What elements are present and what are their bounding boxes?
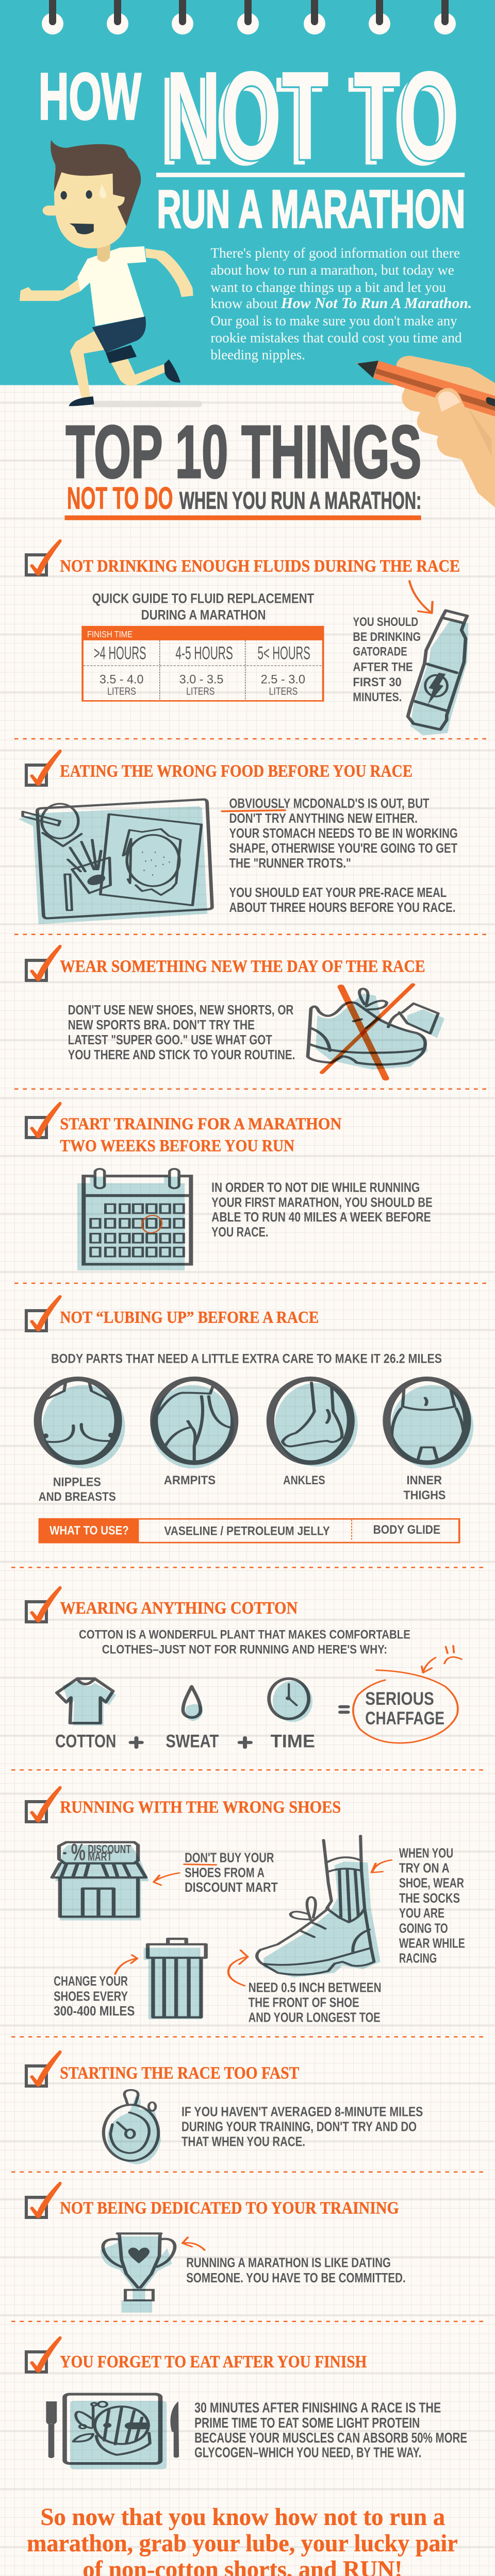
cotton equation: SWEAT — [166, 1731, 219, 1751]
change shoes note: SHOES EVERY — [54, 1989, 128, 2004]
protein text — [194, 2400, 467, 2461]
panel: 10 eat after finish — [26, 2336, 467, 2469]
icon: checkbox — [26, 1102, 62, 1138]
finish time table: >4 HOURS — [94, 643, 146, 663]
finish time table: 3.5 - 4.0 — [100, 672, 144, 686]
panel: 4 training — [26, 1102, 433, 1270]
heading: top 10 things — [65, 410, 421, 520]
body part labels: THIGHS — [403, 1488, 446, 1502]
icon: fast food tray — [19, 800, 212, 924]
fluid guide subtitle — [92, 591, 314, 622]
fluid guide subtitle: DURING A MARATHON — [141, 607, 266, 622]
finish time table: 5< HOURS — [258, 643, 310, 663]
serious chaffage callout: CHAFFAGE — [365, 1708, 444, 1728]
serious chaffage callout: SERIOUS — [365, 1689, 434, 1709]
finish time table: LITERS — [269, 686, 298, 698]
gatorade note: FIRST 30 — [353, 675, 402, 689]
shoe fit note — [228, 1950, 382, 2025]
panel: 5 lubing up — [26, 1295, 473, 1544]
icon: discount store: % — [71, 1839, 86, 1866]
heading — [60, 1114, 341, 1155]
cotton equation — [55, 1707, 348, 1751]
icon: checkbox — [26, 2050, 62, 2087]
runner character — [20, 140, 202, 407]
title: HOW — [39, 59, 141, 133]
icon: checkbox — [26, 2182, 62, 2218]
title — [39, 45, 465, 239]
pace text — [182, 2105, 423, 2149]
heading: STARTING THE RACE TOO FAST — [60, 2063, 299, 2082]
what to use bar: VASELINE / PETROLEUM JELLY — [164, 1524, 330, 1538]
icon: t-shirt — [57, 1679, 116, 1725]
intro paragraph: about how to run a marathon, but today we — [210, 262, 454, 278]
body part labels: ARMPITS — [164, 1473, 216, 1487]
pace text: THAT WHEN YOU RACE. — [182, 2134, 305, 2149]
title: NOT — [159, 50, 323, 192]
finish time table: LITERS — [186, 686, 214, 698]
discount mart note: SHOES FROM A — [185, 1865, 265, 1880]
change shoes note: 300-400 MILES — [54, 2004, 135, 2019]
what to use bar — [39, 1518, 459, 1544]
gatorade note: AFTER THE — [353, 660, 413, 674]
intro paragraph: bleeding nipples. — [210, 347, 305, 363]
socks note: RACING — [399, 1951, 437, 1965]
fluid guide subtitle: QUICK GUIDE TO FLUID REPLACEMENT — [92, 591, 314, 606]
icon: checkbox — [26, 750, 62, 786]
finish time table — [82, 626, 324, 701]
finish time table: FINISH TIME — [87, 630, 133, 639]
discount mart note — [185, 1850, 278, 1895]
cotton equation: COTTON — [55, 1731, 116, 1751]
icon: stopwatch — [104, 2090, 161, 2164]
icon: checkbox — [26, 1586, 62, 1622]
body part labels: ANKLES — [283, 1473, 325, 1487]
finish time table: 3.0 - 3.5 — [179, 672, 223, 686]
closing statement — [27, 2503, 458, 2576]
tray text: THE "RUNNER TROTS." — [229, 856, 351, 871]
icon: clock — [269, 1679, 312, 1722]
new gear text: LATEST "SUPER GOO." USE WHAT GOT — [68, 1032, 272, 1047]
change shoes note — [54, 1955, 137, 2019]
panel: 6 cotton — [26, 1586, 461, 1751]
panel: teal header — [0, 0, 495, 407]
panel: 7 wrong shoes: DON'T BUY YOUR — [185, 1850, 274, 1865]
icon: checkbox — [26, 945, 62, 981]
cotton equation: TIME — [271, 1731, 315, 1751]
panel: 7 wrong shoes — [26, 1786, 465, 2025]
icon: trophy — [101, 2233, 175, 2313]
panel: 2 wrong food — [19, 750, 458, 924]
icon: trash can — [144, 1939, 206, 2019]
what to use bar: WHAT TO USE? — [50, 1523, 129, 1537]
new gear text: NEW SPORTS BRA. DON'T TRY THE — [68, 1018, 255, 1032]
intro paragraph: know about — [210, 296, 278, 311]
title: NOT — [166, 45, 329, 186]
panel: 8 too fast — [26, 2050, 423, 2164]
notebook spiral rings — [42, 0, 456, 35]
icon: discount store: DISCOUNT — [88, 1842, 131, 1856]
icon: checkbox — [26, 1295, 62, 1331]
serious chaffage callout — [353, 1646, 461, 1743]
panel: 7 wrong shoes: CHANGE YOUR — [54, 1974, 128, 1989]
arrow to bottle — [409, 581, 433, 613]
heading: TWO WEEKS BEFORE YOU RUN — [60, 1136, 294, 1155]
finish time table: LITERS — [107, 686, 136, 698]
icon: bottle — [408, 611, 469, 735]
gatorade note: MINUTES. — [353, 690, 402, 704]
socks note — [372, 1845, 465, 1965]
heading: top 10 things: NOT TO DO — [67, 481, 173, 516]
body part labels: INNER — [407, 1473, 442, 1487]
gatorade note: YOU SHOULD — [353, 615, 418, 629]
heading: WEARING ANYTHING COTTON — [60, 1598, 298, 1618]
body part labels — [39, 1473, 446, 1503]
icon: body part circles — [38, 1379, 473, 1468]
tray text — [222, 796, 458, 915]
finish time table: 4-5 HOURS — [175, 643, 233, 663]
icon: checkbox — [26, 539, 62, 575]
icon: discount store — [52, 1839, 149, 1920]
panel: 9 dedication — [26, 2182, 406, 2313]
gatorade note: BE DRINKING — [353, 630, 421, 643]
shoe fit note: THE FRONT OF SHOE — [249, 1995, 359, 2010]
icon: shoe with sock — [257, 1836, 381, 1977]
icon: checkbox — [26, 1786, 62, 1822]
icon: calendar — [77, 1169, 191, 1270]
body part labels: AND BREASTS — [39, 1490, 116, 1503]
dating text — [183, 2238, 406, 2285]
icon: plate with fish and cutlery — [47, 2394, 179, 2469]
body part labels: NIPPLES — [53, 1475, 101, 1488]
new gear text — [68, 1003, 295, 1062]
panel: 1 fluids — [26, 539, 469, 735]
panel: 3 something new — [26, 945, 444, 1078]
panel: 7 wrong shoes: DISCOUNT MART — [185, 1880, 278, 1895]
icon: discount store: MART — [88, 1850, 112, 1863]
what to use bar: BODY GLIDE — [373, 1523, 440, 1536]
finish time table: 2.5 - 3.0 — [261, 672, 305, 686]
intro paragraph — [210, 245, 472, 363]
icon: hand holding pencil — [356, 356, 495, 507]
icon: checkbox — [26, 2336, 62, 2372]
gatorade note: GATORADE — [353, 645, 407, 658]
training text — [211, 1180, 433, 1240]
arrow to store — [154, 1873, 179, 1885]
icon: crossed out shoe — [308, 985, 444, 1078]
icon: sweat drop — [183, 1686, 203, 1721]
cotton text — [79, 1628, 410, 1656]
intro paragraph: want to change things up a bit and let you — [210, 279, 446, 295]
gatorade note — [353, 615, 421, 704]
training text: YOU RACE. — [211, 1225, 268, 1240]
